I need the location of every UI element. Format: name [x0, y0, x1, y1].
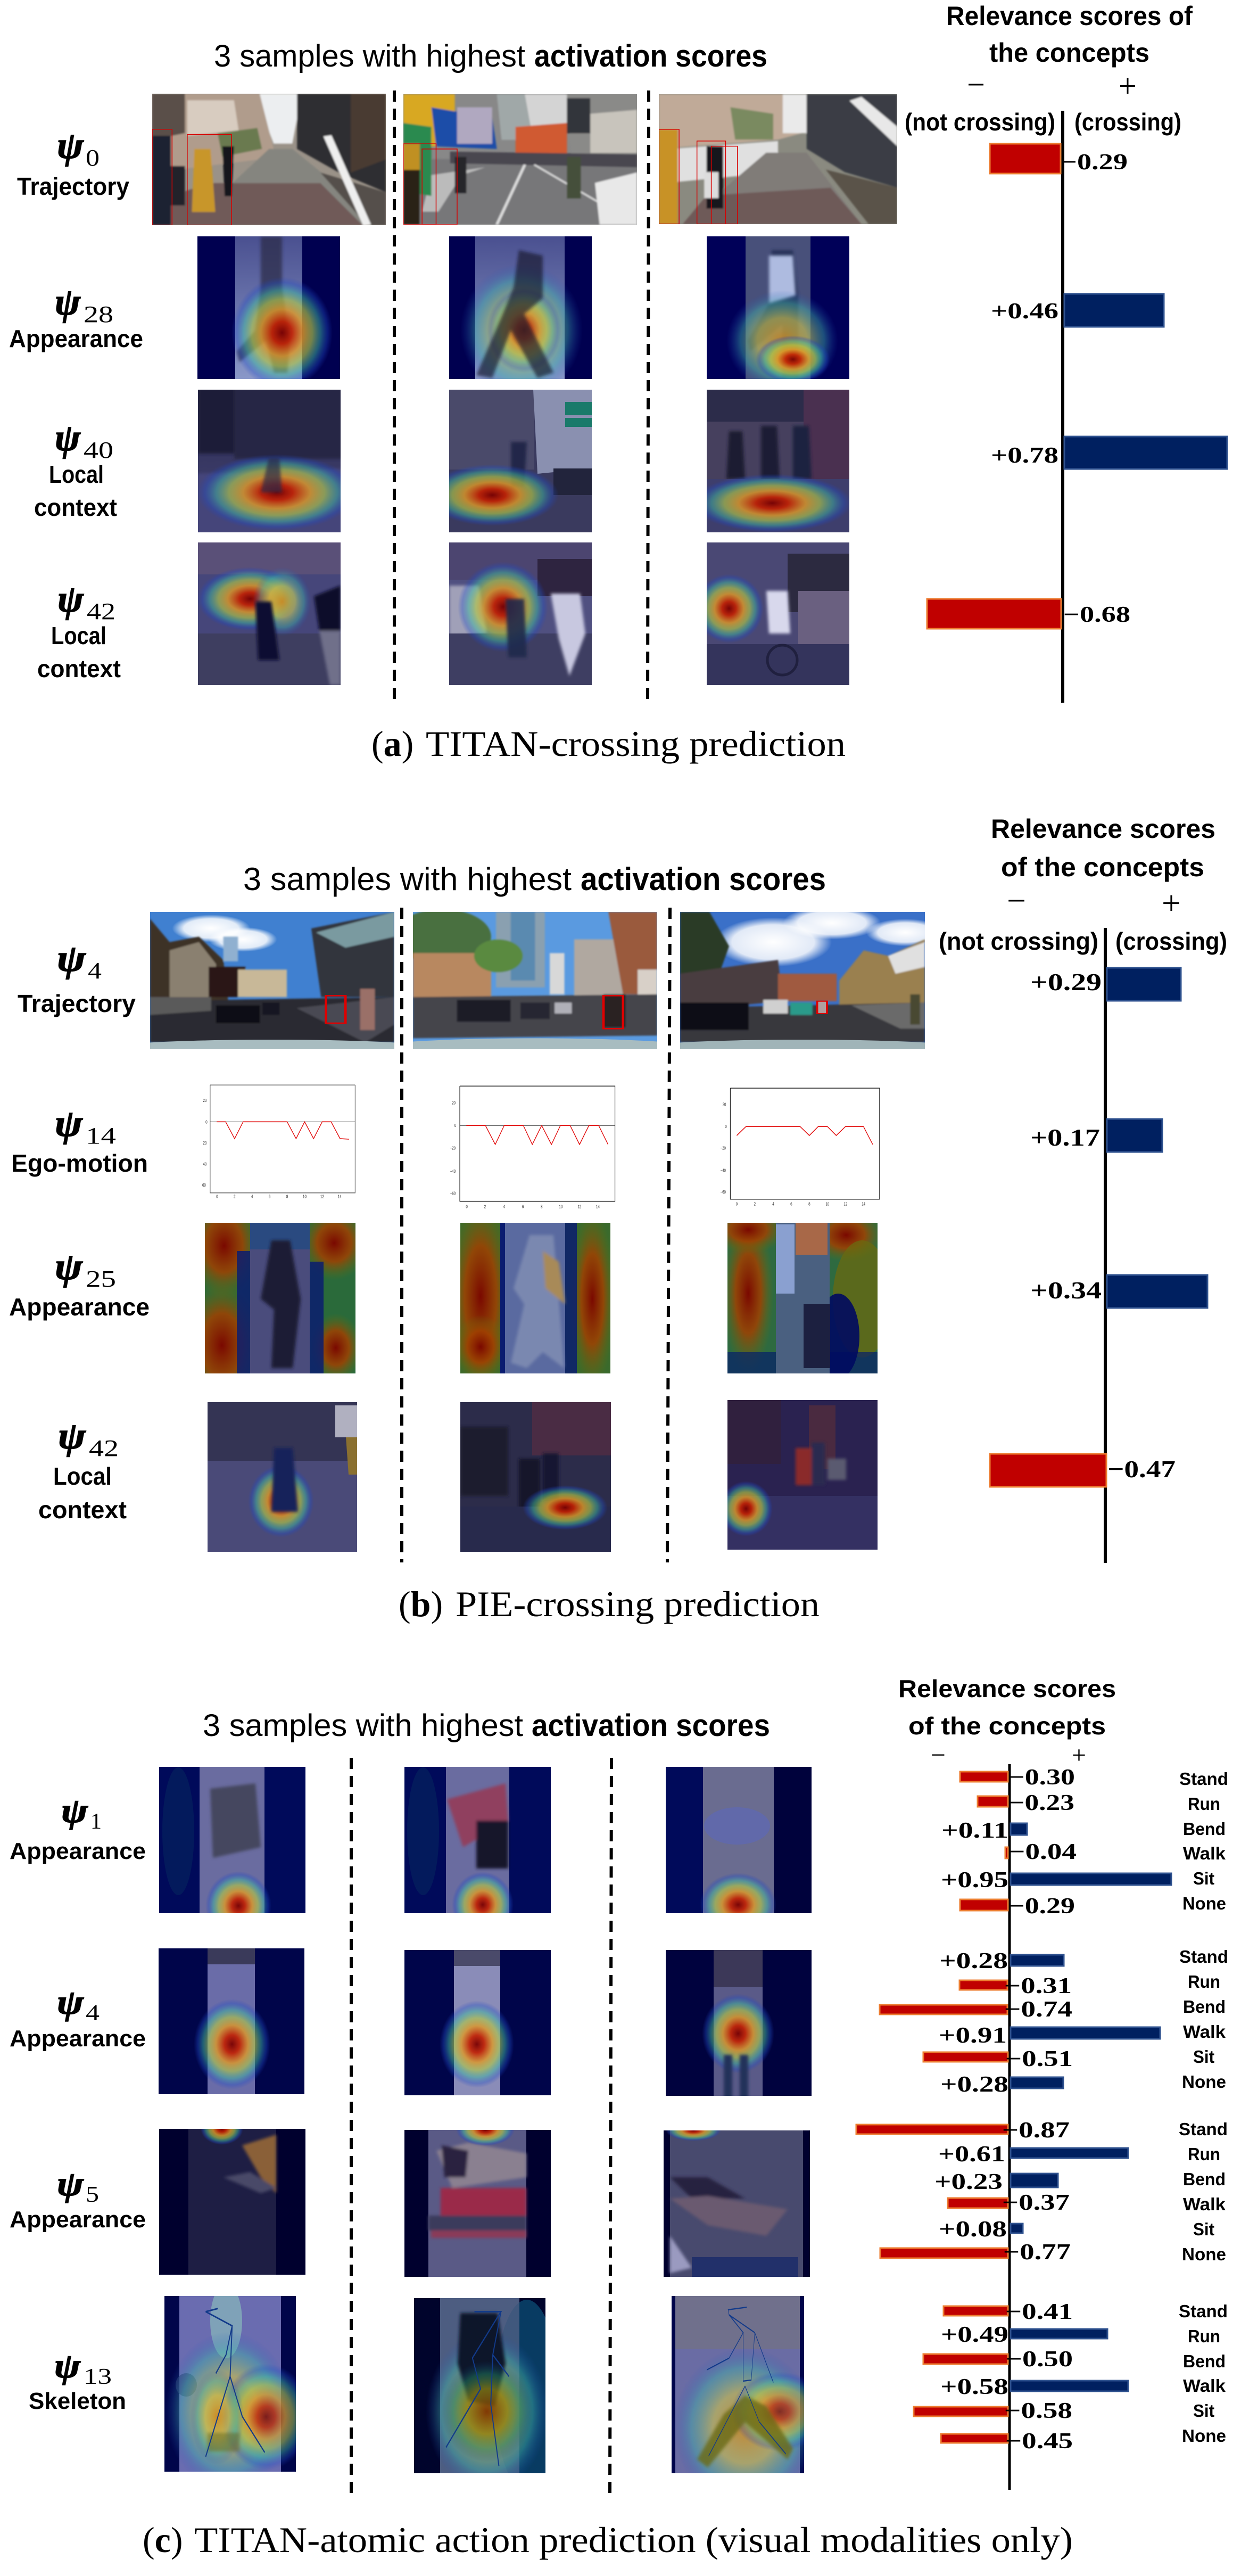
chart: ego-motion sample 2: 12: [578, 1205, 581, 1209]
bar: psi 25 plus 0.34: [1030, 1275, 1207, 1308]
chart: ego-motion sample 2: 10: [559, 1205, 562, 1209]
chart: ego-motion sample 1: 6: [269, 1195, 270, 1199]
row label: psi 1 appearance: ψ: [61, 1791, 88, 1830]
bar: Bend minus 0.74: −0.74: [1004, 1997, 1072, 2022]
row label: psi 40 local context: context: [34, 493, 117, 521]
row label: psi 42 local context: 42: [87, 598, 115, 624]
chart: ego-motion sample 3: 8: [808, 1203, 810, 1207]
row label: psi 4 trajectory: ψ: [57, 937, 86, 980]
heatmap: appearance row 1 sample 3: [666, 1767, 812, 1937]
action labels: Bend: [1183, 1997, 1226, 2017]
bar group: psi 13 relevance by action: [914, 2300, 1228, 2454]
chart: ego-motion sample 1: 8: [286, 1195, 288, 1199]
legend: polarity signs: (not crossing): [939, 927, 1098, 955]
chart: ego-motion sample 1: 20: [203, 1099, 206, 1103]
bar: Sit plus 0.95: [941, 1868, 1171, 1892]
bar: Stand minus 0.41: [944, 2300, 1073, 2324]
row label: psi 42 local context: Local: [53, 1462, 112, 1490]
chart: ego-motion sample 1: 0: [205, 1121, 208, 1125]
bar group: psi 5 relevance by action: [856, 2118, 1228, 2265]
bar: Run plus 0.61: +0.61: [938, 2142, 1005, 2167]
bar: psi 14 plus 0.17: [1030, 1119, 1162, 1152]
row label: psi 13 skeleton: Skeleton: [29, 2388, 126, 2414]
row label: psi 40 local context: ψ: [55, 416, 81, 459]
row label: psi 1 appearance: Appearance: [10, 1838, 146, 1864]
chart: ego-motion sample 3: [721, 1088, 880, 1207]
row label: psi 42 local context: ψ: [57, 578, 84, 620]
chart: ego-motion sample 3: 12: [843, 1203, 847, 1207]
divider: sample columns: [394, 90, 649, 703]
chart: ego-motion sample 3: 14: [862, 1203, 865, 1207]
bar: psi 42 minus 0.68: [927, 599, 1130, 629]
bar: Sit plus 0.95: +0.95: [941, 1868, 1008, 1892]
chart: ego-motion sample 1: 12: [320, 1195, 324, 1199]
bar: Bend minus 0.50: [923, 2347, 1073, 2372]
action labels: Run: [1188, 2326, 1220, 2346]
heatmap: appearance row 2 sample 3: [666, 1950, 812, 2100]
legend: polarity signs: +: [1119, 68, 1137, 104]
chart: ego-motion sample 3: 6: [790, 1203, 792, 1207]
chart: ego-motion sample 3: 0: [736, 1203, 738, 1207]
heatmap: appearance row 1 sample 2: [404, 1767, 551, 1938]
row label: psi 4 trajectory: 4: [88, 958, 102, 984]
heading: relevance scores: Relevance scores: [898, 1675, 1116, 1702]
chart: ego-motion sample 2: 4: [503, 1205, 505, 1209]
panel: TITAN-atomic action prediction: [10, 1675, 1228, 2560]
heatmap: appearance row 3 sample 2: [404, 2114, 551, 2277]
chart: ego-motion sample 1: 40: [203, 1163, 206, 1167]
photo: street sample 3: [659, 94, 897, 224]
bar: Walk plus 0.58: [940, 2375, 1128, 2399]
bar: Stand plus 0.28: [939, 1949, 1064, 1973]
bar: Bend minus 0.50: −0.50: [1006, 2347, 1073, 2372]
chart: ego-motion sample 1: [202, 1085, 355, 1199]
legend: polarity signs: −: [1007, 883, 1026, 918]
bar: Bend plus 0.11: [941, 1818, 1027, 1843]
heatmap: appearance row 2 sample 2: [404, 1950, 551, 2095]
chart: ego-motion sample 3: 10: [825, 1203, 829, 1207]
row label: psi 25 appearance: 25: [86, 1266, 116, 1292]
bar: Run plus 0.49: +0.49: [941, 2323, 1008, 2347]
chart: ego-motion sample 3: −20: [721, 1147, 726, 1151]
bar: None minus 0.77: −0.77: [1003, 2240, 1071, 2265]
row label: psi 5 appearance: Appearance: [10, 2207, 146, 2233]
action labels: Walk: [1183, 2376, 1226, 2396]
heatmap: appearance sample 1: [182, 1192, 369, 1409]
legend: polarity signs: [939, 883, 1227, 955]
row label: psi 4 appearance: Appearance: [10, 2026, 146, 2052]
bar: Sit plus 0.08: +0.08: [939, 2217, 1007, 2242]
bar: Walk minus 0.04: −0.04: [1008, 1840, 1077, 1864]
heatmap: local context sample 2: [426, 390, 592, 532]
bar: Stand minus 0.87: −0.87: [1002, 2118, 1070, 2143]
bar: Run minus 0.31: [959, 1974, 1072, 1998]
row label: psi 40 local context: 40: [84, 437, 113, 463]
bar: psi 14 plus 0.17: +0.17: [1030, 1124, 1100, 1151]
row label: psi 13 skeleton: [29, 2347, 126, 2414]
bar: Sit minus 0.51: [923, 2047, 1073, 2071]
heading: relevance scores: of the concepts: [1001, 852, 1204, 882]
bar: Run minus 0.31: −0.31: [1004, 1974, 1072, 1998]
row label: psi 13 skeleton: ψ: [54, 2347, 81, 2385]
action labels: Sit: [1193, 2047, 1214, 2067]
axis: relevance axis: [1008, 1764, 1011, 2490]
action labels: Walk: [1183, 2194, 1226, 2214]
row label: psi 14 ego-motion: 14: [86, 1123, 116, 1149]
row label: psi 25 appearance: ψ: [55, 1245, 83, 1288]
action labels: Bend: [1183, 2169, 1226, 2189]
row label: psi 42 local context: [37, 578, 121, 682]
row label: psi 42 local context: ψ: [58, 1414, 86, 1457]
row label: psi 42 local context: context: [37, 655, 121, 682]
heatmap: skeleton sample 2: [414, 2298, 559, 2491]
title: samples heading: 3 samples with highest: [214, 39, 525, 73]
action labels: None: [1182, 2426, 1226, 2446]
bar: psi 4 plus 0.29: [1030, 968, 1181, 1001]
caption: panel a: TITAN-crossing prediction: [426, 723, 846, 764]
photo: street sample 1: [152, 94, 386, 225]
bar: Bend plus 0.11: +0.11: [941, 1818, 1008, 1843]
row label: psi 0 trajectory: [17, 124, 129, 200]
bar: psi 40 plus 0.78: +0.78: [991, 443, 1058, 468]
title: samples heading: activation scores: [534, 39, 767, 73]
action labels: Stand: [1179, 1769, 1228, 1789]
bar: Sit minus 0.58: −0.58: [1004, 2399, 1072, 2423]
row label: psi 4 appearance: [10, 1983, 146, 2052]
row label: psi 14 ego-motion: [11, 1102, 148, 1177]
action labels: Bend: [1183, 2351, 1226, 2371]
row label: psi 5 appearance: 5: [86, 2183, 99, 2207]
action labels: [1179, 1947, 1228, 2092]
bar group: psi 4 relevance by action: [880, 1947, 1228, 2097]
title: samples heading: activation scores: [532, 1708, 770, 1743]
row label: psi 28 appearance: Appearance: [9, 325, 143, 352]
divider: sample columns: [351, 1758, 611, 2497]
title: samples heading: 3 samples with highest: [203, 1708, 523, 1743]
bar: Walk plus 0.58: +0.58: [940, 2375, 1008, 2399]
action labels: None: [1182, 2072, 1226, 2092]
bar: None minus 0.29: [960, 1894, 1075, 1919]
panel: PIE-crossing prediction: [9, 814, 1227, 1624]
heatmap: skeleton sample 3: [672, 2296, 828, 2507]
chart: ego-motion sample 2: 14: [596, 1205, 600, 1209]
heatmap: local context sample 4: [197, 542, 341, 685]
heatmap: appearance row 3 sample 3: [664, 2120, 810, 2277]
heatmap: local context sample 3: [692, 390, 852, 532]
photo: street sample 3: [631, 907, 974, 1059]
chart: ego-motion sample 2: −60: [450, 1192, 456, 1196]
heatmap: appearance row 2 sample 1: [159, 1948, 304, 2094]
action labels: Run: [1188, 2144, 1220, 2164]
bar: psi 28 plus 0.46: +0.46: [991, 299, 1058, 324]
row label: psi 40 local context: Local: [49, 460, 104, 488]
action labels: None: [1182, 1894, 1226, 1913]
bar: psi 0 minus 0.29: [990, 144, 1128, 175]
row label: psi 28 appearance: 28: [84, 301, 113, 327]
action labels: Walk: [1183, 1843, 1226, 1863]
photo: street sample 2: [403, 94, 637, 225]
photo: street sample 2: [364, 909, 706, 1060]
heatmap: appearance sample 1: [197, 236, 340, 379]
bar: Stand minus 0.41: −0.41: [1005, 2300, 1073, 2324]
legend: polarity signs: (not crossing): [905, 108, 1055, 136]
legend: polarity signs: (crossing): [1074, 108, 1181, 136]
bar: None minus 0.29: −0.29: [1008, 1894, 1075, 1919]
chart: ego-motion sample 1: 2: [234, 1195, 236, 1199]
row label: psi 42 local context: [38, 1414, 127, 1524]
caption: panel b: (b): [399, 1584, 443, 1624]
row label: psi 13 skeleton: 13: [84, 2365, 112, 2389]
action labels: Stand: [1179, 2119, 1228, 2139]
axis: relevance axis: [1061, 111, 1064, 703]
heatmap: appearance sample 3: [707, 236, 849, 379]
bar: Run plus 0.49: [941, 2323, 1107, 2347]
bar: psi 25 plus 0.34: +0.34: [1030, 1277, 1102, 1304]
row label: psi 28 appearance: ψ: [55, 281, 81, 323]
bar: Bend minus 0.74: [880, 1997, 1072, 2022]
chart: ego-motion sample 3: 0: [725, 1125, 727, 1129]
bar: psi 0 minus 0.29: −0.29: [1061, 150, 1128, 175]
chart: ego-motion sample 2: [450, 1086, 615, 1209]
heading: relevance scores: [991, 814, 1215, 882]
row label: psi 4 appearance: 4: [86, 2001, 100, 2026]
caption: panel c: (c): [143, 2520, 183, 2560]
chart: ego-motion sample 2: 8: [541, 1205, 543, 1209]
row label: psi 25 appearance: [9, 1245, 150, 1321]
chart: ego-motion sample 2: −40: [450, 1170, 456, 1174]
bar: Bend plus 0.23: +0.23: [934, 2170, 1003, 2194]
action labels: Walk: [1183, 2022, 1226, 2042]
chart: ego-motion sample 1: 20: [203, 1141, 206, 1146]
chart: ego-motion sample 2: 20: [452, 1101, 456, 1106]
row label: psi 42 local context: Local: [51, 622, 106, 649]
bar: Walk plus 0.91: +0.91: [939, 2023, 1007, 2048]
heading: relevance scores: [946, 1, 1193, 68]
caption: panel c: TITAN-atomic action prediction (visual modalities only): [194, 2520, 1073, 2560]
row label: psi 0 trajectory: 0: [86, 145, 100, 171]
heatmap: appearance sample 3: [711, 1206, 891, 1379]
chart: ego-motion sample 3: 20: [723, 1103, 726, 1107]
heatmap: skeleton sample 1: [164, 2284, 311, 2491]
action labels: Run: [1188, 1972, 1220, 1991]
bar group: psi 1 relevance by action: [941, 1765, 1228, 1919]
heatmap: appearance sample 2: [449, 1195, 615, 1397]
chart: ego-motion sample 3: 2: [754, 1203, 756, 1207]
caption: panel a: (a): [371, 723, 413, 764]
bar: Walk plus 0.91: [939, 2023, 1160, 2048]
action labels: Sit: [1193, 1869, 1214, 1888]
chart: ego-motion sample 2: 6: [522, 1205, 524, 1209]
action labels: Sit: [1193, 2401, 1214, 2421]
action labels: Stand: [1179, 2301, 1228, 2321]
row label: psi 28 appearance: [9, 281, 143, 352]
legend: polarity signs: −: [931, 1741, 946, 1768]
heatmap: appearance row 1 sample 1: [159, 1767, 305, 1940]
legend: polarity signs: −: [967, 67, 985, 102]
chart: ego-motion sample 2: 2: [484, 1205, 486, 1209]
panel: TITAN-crossing prediction: [9, 1, 1227, 764]
title: samples heading: [214, 39, 767, 73]
action labels: Sit: [1193, 2219, 1214, 2239]
chart: ego-motion sample 3: 4: [772, 1203, 774, 1207]
heatmap: appearance sample 2: [449, 236, 592, 379]
legend: polarity signs: [931, 1741, 1086, 1768]
heatmap: local context sample 1: [192, 383, 357, 538]
row label: psi 40 local context: [34, 416, 117, 521]
bar: Stand minus 0.30: [960, 1765, 1075, 1790]
bar: Stand minus 0.30: −0.30: [1008, 1765, 1075, 1790]
chart: ego-motion sample 1: 14: [338, 1195, 342, 1199]
chart: ego-motion sample 3: −60: [721, 1190, 726, 1195]
chart: ego-motion sample 1: 10: [303, 1195, 307, 1199]
row label: psi 4 appearance: ψ: [57, 1983, 84, 2022]
bar: Run minus 0.23: −0.23: [1008, 1791, 1074, 1815]
chart: ego-motion sample 2: −20: [450, 1147, 456, 1151]
title: samples heading: [203, 1708, 770, 1743]
chart: ego-motion sample 2: 0: [466, 1205, 468, 1209]
chart: ego-motion sample 1: 0: [216, 1195, 218, 1199]
legend: polarity signs: +: [1162, 885, 1181, 921]
heatmap: appearance row 3 sample 1: [159, 2113, 305, 2275]
bar: None plus 0.28: +0.28: [940, 2072, 1008, 2097]
action labels: Stand: [1179, 1947, 1228, 1966]
legend: polarity signs: +: [1072, 1741, 1086, 1768]
row label: psi 5 appearance: [10, 2165, 146, 2233]
action labels: Run: [1188, 1794, 1220, 1814]
photo: street sample 1: [101, 912, 443, 1059]
row label: psi 42 local context: context: [38, 1496, 127, 1524]
chart: ego-motion sample 2: 0: [454, 1124, 456, 1128]
heatmap: local context sample 2: [460, 1402, 611, 1552]
bar: Walk minus 0.37: [948, 2191, 1070, 2215]
bar: psi 4 plus 0.29: +0.29: [1030, 968, 1102, 995]
title: samples heading: [243, 861, 826, 897]
heading: relevance scores: Relevance scores: [991, 814, 1215, 844]
heatmap: local context sample 6: [694, 542, 849, 685]
bar: Run plus 0.61: [938, 2142, 1128, 2167]
row label: psi 0 trajectory: Trajectory: [17, 172, 129, 200]
bar: psi 28 plus 0.46: [991, 294, 1164, 327]
chart: ego-motion sample 1: 60: [202, 1183, 206, 1188]
bar: Stand plus 0.28: +0.28: [939, 1949, 1008, 1973]
action labels: [1179, 1769, 1228, 1913]
row label: psi 0 trajectory: ψ: [57, 124, 84, 167]
row label: psi 1 appearance: [10, 1791, 146, 1864]
title: samples heading: 3 samples with highest: [243, 861, 572, 897]
caption: panel b: PIE-crossing prediction: [456, 1584, 820, 1624]
row label: psi 1 appearance: 1: [90, 1809, 102, 1834]
bar: Sit plus 0.08: [939, 2217, 1023, 2242]
row label: psi 25 appearance: Appearance: [9, 1293, 150, 1321]
row label: psi 14 ego-motion: ψ: [55, 1102, 83, 1145]
bar: None minus 0.45: −0.45: [1005, 2429, 1073, 2454]
row label: psi 5 appearance: ψ: [57, 2165, 84, 2203]
bar: None minus 0.77: [880, 2240, 1071, 2265]
axis: relevance axis: [1104, 928, 1107, 1563]
heatmap: local context sample 1: [208, 1402, 357, 1552]
row label: psi 4 trajectory: Trajectory: [18, 990, 136, 1017]
heading: relevance scores: the concepts: [989, 38, 1149, 68]
bar: psi 40 plus 0.78: [991, 437, 1227, 469]
bar: psi 42 minus 0.47: [990, 1454, 1176, 1487]
bar: Sit minus 0.51: −0.51: [1005, 2047, 1073, 2071]
bar: None minus 0.45: [941, 2429, 1073, 2454]
bar: Run minus 0.23: [978, 1791, 1074, 1815]
title: samples heading: activation scores: [581, 861, 826, 897]
action labels: [1179, 2119, 1228, 2264]
bar: Sit minus 0.58: [914, 2399, 1072, 2423]
heading: relevance scores: [898, 1675, 1116, 1740]
bar: Stand minus 0.87: [856, 2118, 1070, 2143]
divider: sample columns: [402, 908, 670, 1562]
bar: Walk minus 0.37: −0.37: [1002, 2191, 1070, 2215]
action labels: Bend: [1183, 1819, 1226, 1839]
action labels: None: [1182, 2244, 1226, 2264]
bar: Bend plus 0.23: [934, 2170, 1058, 2194]
bar: psi 42 minus 0.68: −0.68: [1063, 603, 1130, 627]
row label: psi 4 trajectory: [18, 937, 136, 1017]
heatmap: local context sample 3: [719, 1400, 878, 1550]
bar: None plus 0.28: [940, 2072, 1063, 2097]
action labels: [1179, 2301, 1228, 2446]
heading: relevance scores: Relevance scores of: [946, 1, 1193, 31]
row label: psi 14 ego-motion: Ego-motion: [11, 1149, 148, 1177]
legend: polarity signs: (crossing): [1115, 927, 1227, 955]
heatmap: local context sample 5: [449, 542, 592, 685]
chart: ego-motion sample 1: 4: [251, 1195, 253, 1199]
heading: relevance scores: of the concepts: [908, 1712, 1106, 1740]
bar: psi 42 minus 0.47: −0.47: [1107, 1455, 1176, 1483]
chart: ego-motion sample 3: −40: [721, 1169, 726, 1173]
row label: psi 42 local context: 42: [89, 1435, 119, 1461]
legend: polarity signs: [905, 67, 1181, 136]
